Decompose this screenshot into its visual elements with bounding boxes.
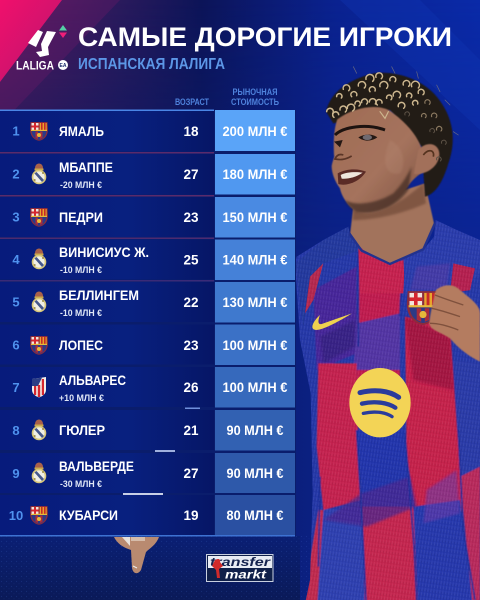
logo mark <box>28 30 56 57</box>
row 4: 25 <box>183 252 199 268</box>
pinstripes <box>318 247 475 600</box>
row 4: ВИНИСИУС Ж. <box>59 245 149 260</box>
player neck <box>350 183 434 264</box>
row 2 <box>0 154 295 194</box>
row 8 <box>0 410 295 450</box>
row 7 <box>0 367 295 408</box>
row 5: 5 <box>12 294 20 310</box>
row 5 <box>0 282 295 322</box>
row 7: +10 МЛН € <box>59 393 104 403</box>
row 8: 8 <box>12 423 20 438</box>
row 8: 90 МЛН € <box>226 423 284 438</box>
player head <box>326 67 458 213</box>
row 10: 80 МЛН € <box>226 508 284 523</box>
row 7: 100 МЛН € <box>222 380 288 395</box>
row 6 <box>0 324 295 365</box>
row 1: 200 МЛН € <box>222 124 288 139</box>
face <box>332 107 425 212</box>
row 9: 27 <box>183 466 199 481</box>
ear <box>414 144 439 174</box>
laliga logo: LALIGA <box>16 58 54 72</box>
row 10: 10 <box>9 508 23 523</box>
row 3: 23 <box>183 210 199 225</box>
laliga logo: EA <box>60 63 67 69</box>
transfermarkt logo: markt <box>225 568 267 582</box>
row 2: -20 МЛН € <box>60 180 102 190</box>
row 5: 22 <box>183 295 199 310</box>
row 1 <box>0 110 295 152</box>
jersey crest <box>407 291 439 325</box>
subtitle: ИСПАНСКАЯ ЛАЛИГА <box>78 56 225 73</box>
hand <box>429 285 480 362</box>
jersey collar <box>349 223 435 264</box>
row 10: КУБАРСИ <box>59 508 118 523</box>
row 5: 130 МЛН € <box>222 295 288 310</box>
laliga logo <box>16 25 68 72</box>
row 6: ЛОПЕС <box>59 338 103 353</box>
row 2: 180 МЛН € <box>222 167 288 182</box>
row 4: 4 <box>12 252 20 267</box>
row 1: 1 <box>12 124 20 138</box>
table <box>0 110 296 536</box>
stripes upper <box>357 247 405 380</box>
row 1: 18 <box>183 124 199 139</box>
row 4 <box>0 240 295 280</box>
row 7: 7 <box>12 380 20 395</box>
stripes lower <box>317 363 362 510</box>
row 9: 9 <box>12 466 20 481</box>
swoosh <box>312 313 352 330</box>
transfermarkt logo <box>206 554 273 582</box>
player photo: Lamine Yamal <box>290 67 480 600</box>
row 2: МБАППЕ <box>59 160 113 175</box>
row 9: ВАЛЬВЕРДЕ <box>59 459 134 474</box>
row 6: 6 <box>12 338 20 352</box>
row 3: 150 МЛН € <box>222 210 288 225</box>
row 6: 100 МЛН € <box>222 338 288 353</box>
row 10 <box>0 495 295 535</box>
transfermarkt logo: transfer <box>210 555 272 569</box>
row 9: 90 МЛН € <box>226 466 284 481</box>
row 2: 2 <box>12 166 20 182</box>
row 10: 19 <box>183 508 199 523</box>
table header: market value <box>231 87 279 107</box>
table header: market value: СТОИМОСТЬ <box>231 97 279 107</box>
row 9: -30 МЛН € <box>60 479 102 489</box>
row 4: -10 МЛН € <box>60 265 102 275</box>
shading folds <box>323 477 417 527</box>
row 5: -10 МЛН € <box>60 308 102 318</box>
row 3 <box>0 197 295 238</box>
row 2: 27 <box>183 167 199 182</box>
row 7: 26 <box>183 380 199 395</box>
row 3: ПЕДРИ <box>59 210 103 225</box>
row 9 <box>0 453 295 493</box>
row 4: 140 МЛН € <box>222 252 288 268</box>
row 6: 23 <box>183 338 199 353</box>
row 1: ЯМАЛЬ <box>59 124 104 139</box>
table header: market value: РЫНОЧНАЯ <box>232 87 278 97</box>
hair back <box>326 73 453 197</box>
table header: age: ВОЗРАСТ <box>175 97 209 107</box>
player jersey <box>290 220 480 600</box>
curls <box>327 67 458 161</box>
spotify badge <box>349 368 411 437</box>
row 7: АЛЬВАРЕС <box>59 373 126 388</box>
row 3: 3 <box>12 210 20 224</box>
row 5: БЕЛЛИНГЕМ <box>59 288 139 303</box>
hand below table <box>114 537 159 573</box>
row 8: 21 <box>183 423 199 438</box>
row 8: ГЮЛЕР <box>59 423 105 438</box>
sleeve and shoulder blue <box>295 227 360 327</box>
title: САМЫЕ ДОРОГИЕ ИГРОКИ <box>78 22 452 52</box>
